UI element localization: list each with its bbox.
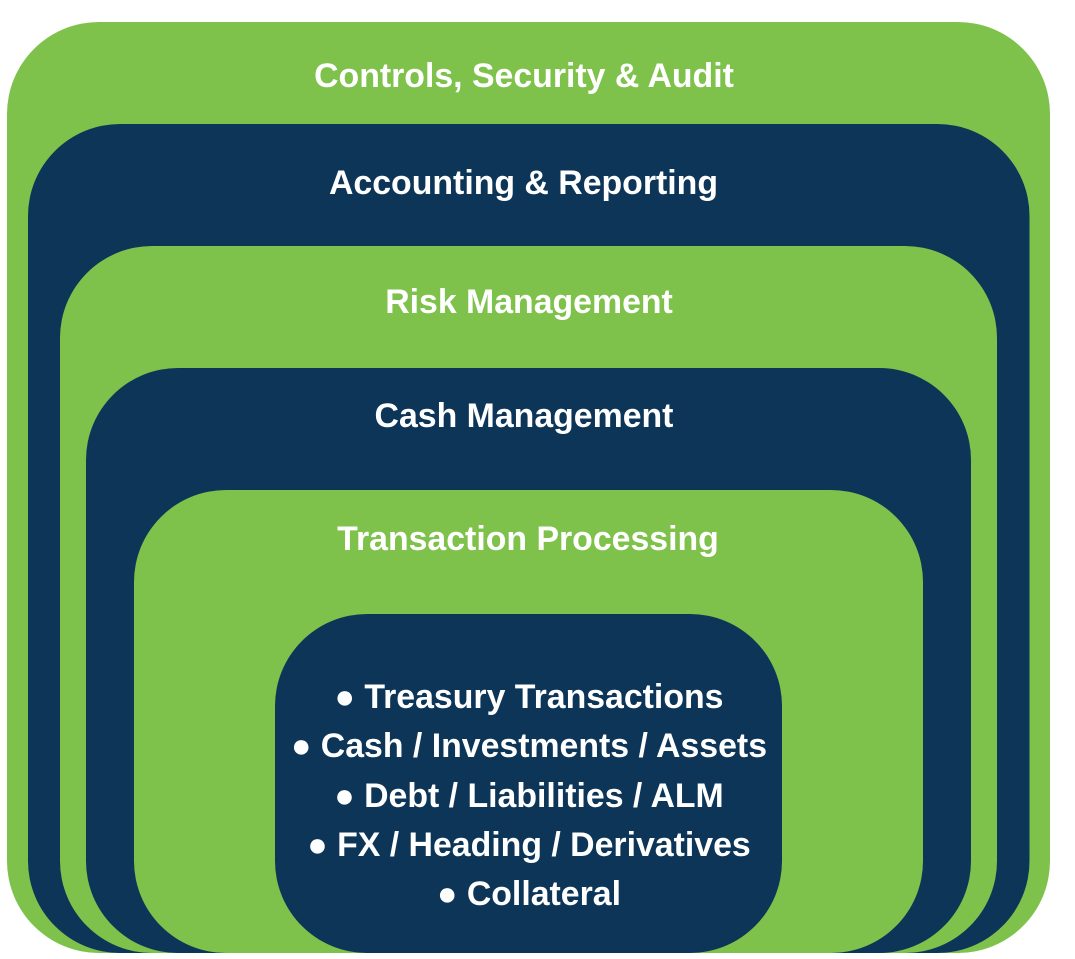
list item: FX / Heading / Derivatives: ● FX / Heading / Derivatives: [307, 826, 751, 864]
list item: Cash / Investments / Assets: ● Cash / Investments / Assets: [291, 727, 767, 765]
layer: Cash Management: Cash Management: [375, 397, 673, 435]
layer: Transaction Processing: Transaction Processing: [337, 520, 719, 558]
list item: Collateral: ● Collateral: [437, 875, 621, 913]
list item: Treasury Transactions: ● Treasury Transactions: [335, 678, 723, 716]
list item: Debt / Liabilities / ALM: ● Debt / Liabilities / ALM: [334, 777, 724, 815]
layer: Controls, Security & Audit: Controls, Security & Audit: [314, 57, 734, 95]
core panel: treasury items: [275, 614, 782, 953]
layer: Accounting & Reporting: Accounting & Reporting: [329, 164, 718, 202]
layer: Risk Management: Risk Management: [385, 283, 673, 321]
